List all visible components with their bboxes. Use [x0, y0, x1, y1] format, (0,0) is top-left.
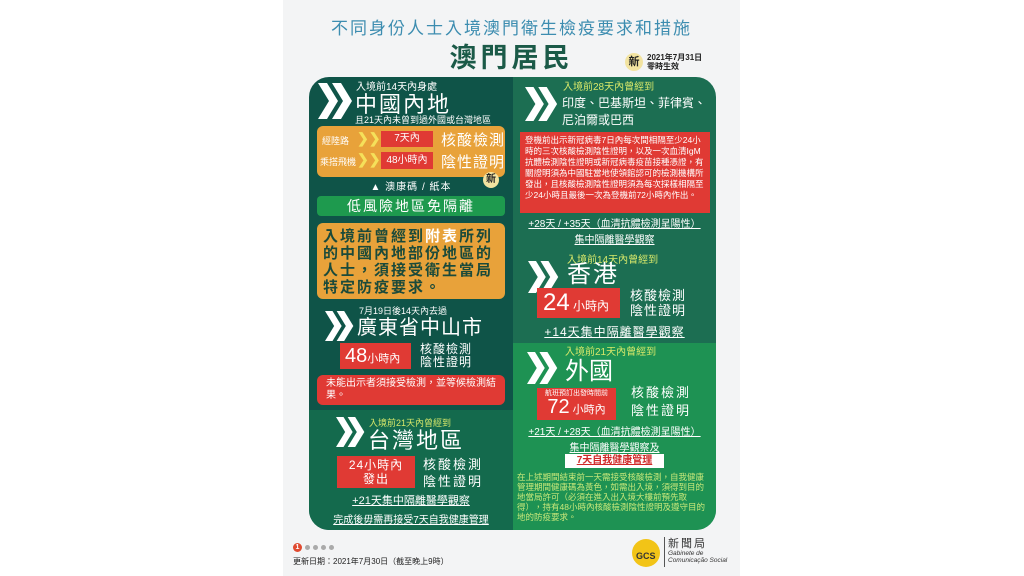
section: zhongshan: 48小時內	[345, 345, 400, 367]
section: taiwan: 核酸檢測	[423, 457, 483, 472]
section: foreign: 72 小時內	[547, 396, 606, 418]
icon: chevrons	[528, 261, 558, 293]
logo: GCS: 新聞局	[668, 538, 707, 550]
section: foreign	[513, 343, 716, 530]
icon: chevrons	[336, 417, 364, 447]
subtitle: 澳門居民	[450, 43, 574, 73]
orange box: 核酸檢測	[441, 132, 505, 149]
icon: chevrons	[325, 311, 354, 341]
green bar: 低風險地區免隔離	[347, 198, 475, 214]
orange box: ❯❯	[357, 130, 380, 146]
section: taiwan: 發出	[363, 472, 389, 486]
orange box: ❯❯	[357, 151, 380, 167]
section: Hong Kong: 24 小時內	[543, 289, 609, 316]
section: foreign: 在上述期間結束前一天需接受核酸檢測，自我健康管理期間健康碼為黃色，如需出入境，須得到目的地當局許可（必須在進入出入境大樓前預先取得），持有48小時內核酸檢測陰性證明及遵守目的地的防疫要求。	[517, 472, 705, 522]
section: taiwan: 台灣地區	[368, 428, 464, 453]
logo: GCS	[632, 537, 728, 567]
section: zhongshan: 核酸檢測	[420, 342, 472, 356]
page indicator dots: 1	[296, 544, 299, 551]
section: Hong Kong: +14天集中隔離醫學觀察	[544, 325, 685, 339]
logo: GCS: Gabinete de	[668, 550, 703, 557]
orange box: 48小時內	[386, 155, 428, 166]
section: foreign: 集中隔離醫學觀察及	[570, 443, 660, 454]
section: zhongshan: 陰性證明	[420, 355, 472, 369]
section: India etc: 印度、巴基斯坦、菲律賓、	[562, 96, 706, 110]
section: zhongshan	[317, 306, 505, 405]
section: foreign: 航班預訂出發時間前	[545, 390, 608, 397]
page indicator dots	[293, 543, 334, 552]
section: taiwan: 完成後毋需再接受7天自我健康管理	[333, 515, 489, 526]
orange box: 7天內	[394, 133, 420, 144]
orange box: 乘搭飛機	[320, 157, 356, 167]
section: zhongshan: 7月19日後14天內去過	[359, 306, 447, 316]
section: mainland: 新	[486, 174, 496, 185]
section: foreign: 陰性證明	[631, 403, 691, 418]
section: foreign: 入境前21天內曾經到	[565, 347, 656, 358]
section: zhongshan: 未能出示者須接受檢測，並等候檢測結果。	[326, 378, 496, 401]
orange notice: 入境前曾經到附表所列的中國內地部份地區的人士，須接受衛生當局特定防疫要求。	[323, 228, 493, 296]
background panel	[283, 0, 740, 576]
section: Hong Kong: 入境前14天內曾經到	[567, 255, 658, 266]
section: India etc: 入境前28天內曾經到	[563, 82, 654, 93]
section: zhongshan: 廣東省中山市	[357, 317, 483, 339]
section: Hong Kong: 陰性證明	[630, 303, 686, 318]
title: 不同身份人士入境澳門衛生檢疫要求和措施	[331, 19, 692, 38]
effective date: 新	[628, 56, 640, 68]
section: taiwan: 24小時內	[349, 458, 403, 472]
green bar	[317, 196, 505, 216]
orange box	[317, 126, 505, 177]
update date: 更新日期：2021年7月30日（截至晚上9時）	[293, 557, 449, 566]
section: taiwan	[309, 410, 513, 530]
icon: chevrons	[318, 83, 352, 119]
section: India etc: 登機前出示新冠病毒7日內每次間相隔至少24小時的三次核酸檢測陰性證明，以及一次血清IgM抗體檢測陰性證明或新冠病毒疫苗接種憑證，有關證明須為中國駐當地使領館認可的檢測機構所發出，且核酸檢測陰性證明須為每次採樣相隔至少24小時且最後一次為登機前72小時內作出。	[525, 135, 704, 200]
section: taiwan: +21天集中隔離醫學觀察	[352, 495, 470, 507]
section: India etc: +28天 / +35天（血清抗體檢測呈陽性）	[528, 219, 701, 230]
section: foreign: +21天 / +28天（血清抗體檢測呈陽性）	[528, 427, 701, 438]
section: taiwan: 入境前21天內曾經到	[369, 418, 451, 428]
section: India etc	[520, 81, 710, 246]
section: foreign: 外國	[565, 358, 613, 385]
orange box: 經陸路	[322, 136, 349, 146]
section: mainland	[317, 81, 505, 299]
section: foreign: 7天自我健康管理	[577, 455, 652, 466]
section: Hong Kong: 核酸檢測	[630, 288, 686, 303]
section: mainland: 且21天內未曾到過外國或台灣地區	[355, 115, 491, 125]
section: Hong Kong	[528, 254, 686, 339]
orange box: 陰性證明	[441, 154, 505, 171]
section: taiwan: 陰性證明	[423, 474, 483, 489]
effective date	[625, 53, 702, 71]
panel: left column	[309, 77, 513, 530]
logo: GCS: Comunicação Social	[668, 557, 727, 564]
section: mainland: ▲ 澳康碼 / 紙本	[370, 182, 452, 193]
logo: GCS: GCS	[636, 551, 656, 561]
effective date: 2021年7月31日	[647, 53, 702, 62]
panel: right column	[513, 77, 716, 530]
effective date: 零時生效	[647, 62, 679, 71]
section: India etc: 集中隔離醫學觀察	[574, 235, 654, 246]
icon: chevrons	[525, 87, 557, 121]
section: mainland: 中國內地	[355, 92, 451, 117]
section: foreign: 核酸檢測	[631, 385, 691, 400]
section: mainland: 入境前14天內身處	[356, 82, 437, 93]
section: Hong Kong: 香港	[567, 261, 619, 288]
icon: chevrons	[527, 352, 558, 384]
section: India etc: 尼泊爾或巴西	[562, 113, 634, 127]
